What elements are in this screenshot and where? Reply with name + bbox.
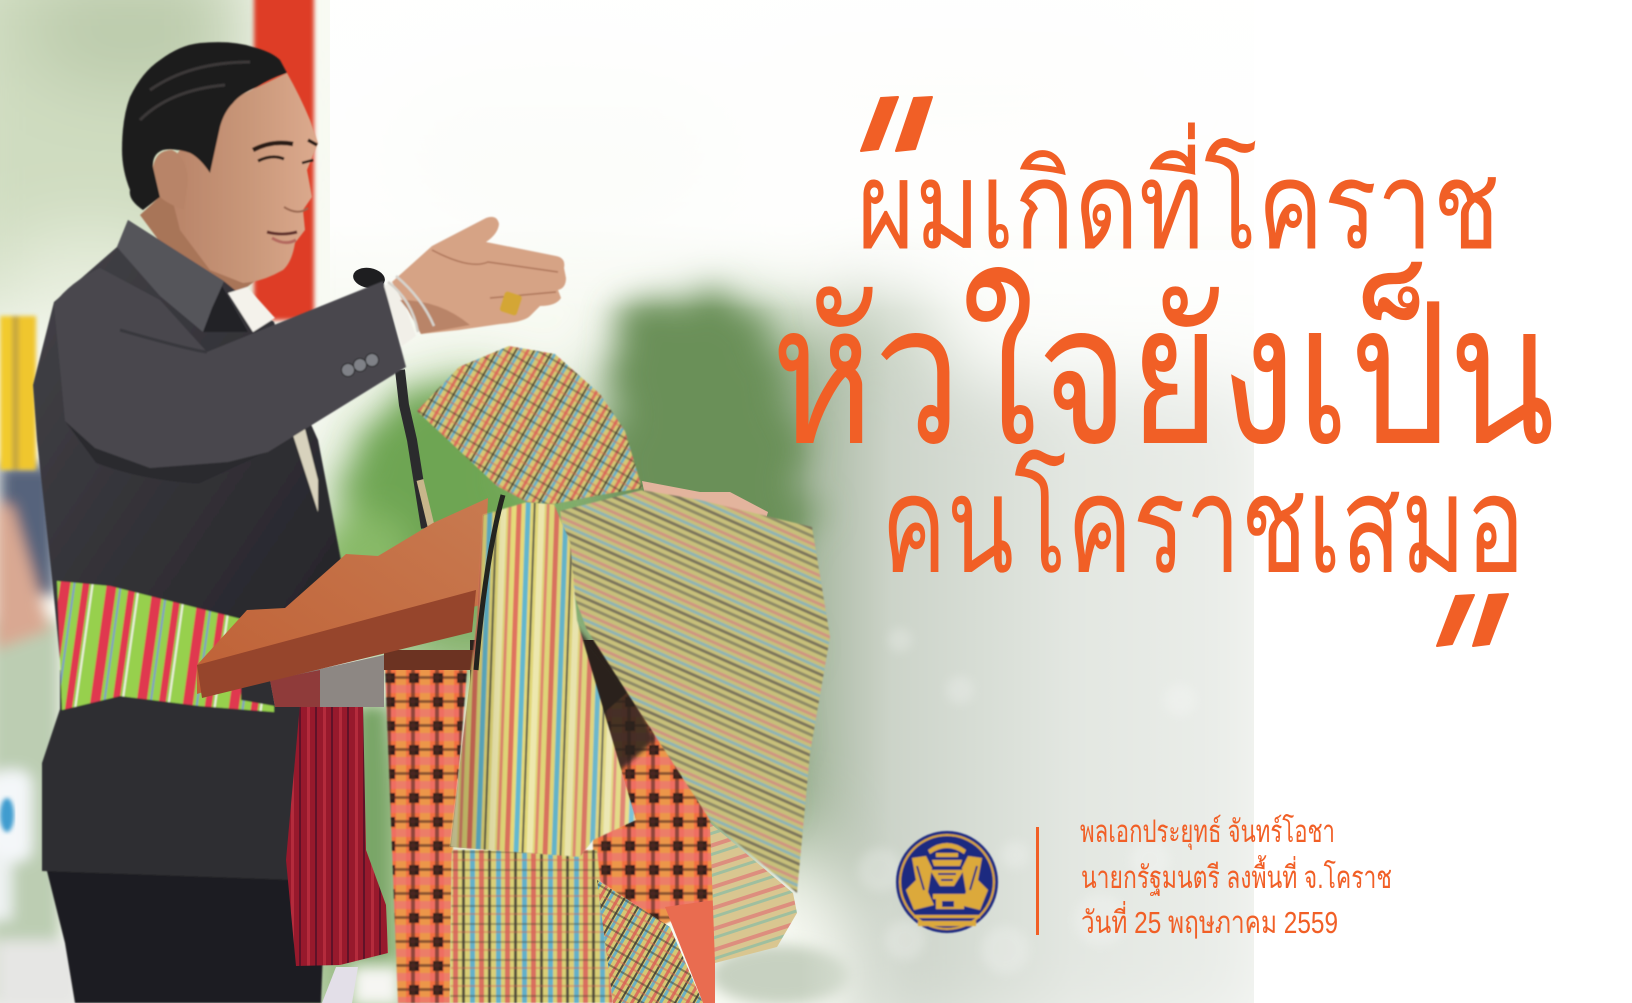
trousers bbox=[47, 870, 326, 1003]
podium shadow bbox=[270, 655, 384, 707]
lower checked cloth bbox=[450, 850, 613, 1003]
caption line 1: พลเอกประยุทธ์ จันทร์โอชา bbox=[1080, 814, 1335, 851]
shadow on red plaid bbox=[575, 625, 655, 780]
red pillar bbox=[254, 0, 314, 320]
right drape bbox=[560, 490, 830, 893]
podium bbox=[197, 498, 488, 698]
left backdrop blurs bbox=[0, 465, 850, 1003]
yellow sign bbox=[0, 316, 36, 470]
fold shading on the fall bbox=[450, 502, 636, 857]
pastel lower cloth bbox=[710, 823, 797, 963]
speaker caption bbox=[1080, 814, 1392, 940]
inner shirt placket bbox=[292, 425, 318, 512]
central stripe fall bbox=[450, 502, 636, 857]
microphone bbox=[352, 265, 431, 528]
sleeve buttons bbox=[342, 354, 378, 376]
waist sash bbox=[57, 581, 274, 712]
speaker figure bbox=[33, 42, 566, 1003]
maroon hanging cloth bbox=[286, 704, 388, 966]
sleeve bbox=[54, 268, 406, 484]
jacket body bbox=[33, 220, 342, 680]
hand bbox=[392, 217, 566, 334]
knot top of cloth bbox=[417, 346, 642, 504]
neck bbox=[140, 160, 290, 300]
hair bbox=[122, 42, 287, 210]
hands behind the drape bbox=[642, 481, 768, 540]
lower jacket bbox=[42, 670, 302, 880]
white fade over the top of photo bbox=[330, 0, 1330, 310]
bangles bbox=[388, 276, 434, 332]
red plaid back cloth bbox=[590, 690, 715, 925]
headline: line 1: ผมเกิดที่โคราช bbox=[857, 122, 1500, 274]
opening quotation mark bbox=[861, 97, 932, 151]
bokeh highlights bbox=[858, 628, 1196, 974]
cable bbox=[476, 495, 503, 670]
lower checked cloth, right bbox=[597, 880, 703, 1003]
face bbox=[165, 73, 318, 283]
gold ring bbox=[499, 291, 523, 316]
caption line 2: นายกรัฐมนตรี ลงพื้นที่ จ.โคราช bbox=[1081, 855, 1392, 896]
government seal bbox=[896, 831, 998, 933]
closing quotation mark bbox=[1437, 594, 1508, 646]
eyebrows, eye, nose and mouth bbox=[253, 140, 317, 243]
foliage mass bbox=[320, 295, 800, 800]
shirt collar bbox=[228, 287, 275, 332]
caption line 3: วันที่ 25 พฤษภาคม 2559 bbox=[1081, 901, 1338, 940]
plaid cloth, left bbox=[385, 667, 467, 1003]
dark hollow behind the falls bbox=[470, 640, 630, 760]
orange stripe panel bbox=[665, 900, 715, 1003]
white stand under the cloth bbox=[322, 967, 358, 1003]
white right side panel bbox=[1254, 0, 1632, 1003]
jacket collar bbox=[117, 220, 224, 332]
ear bbox=[153, 150, 188, 210]
divider bbox=[1036, 827, 1039, 935]
shirt cuff bbox=[384, 280, 416, 346]
translucent veil panel bbox=[800, 250, 1254, 1003]
